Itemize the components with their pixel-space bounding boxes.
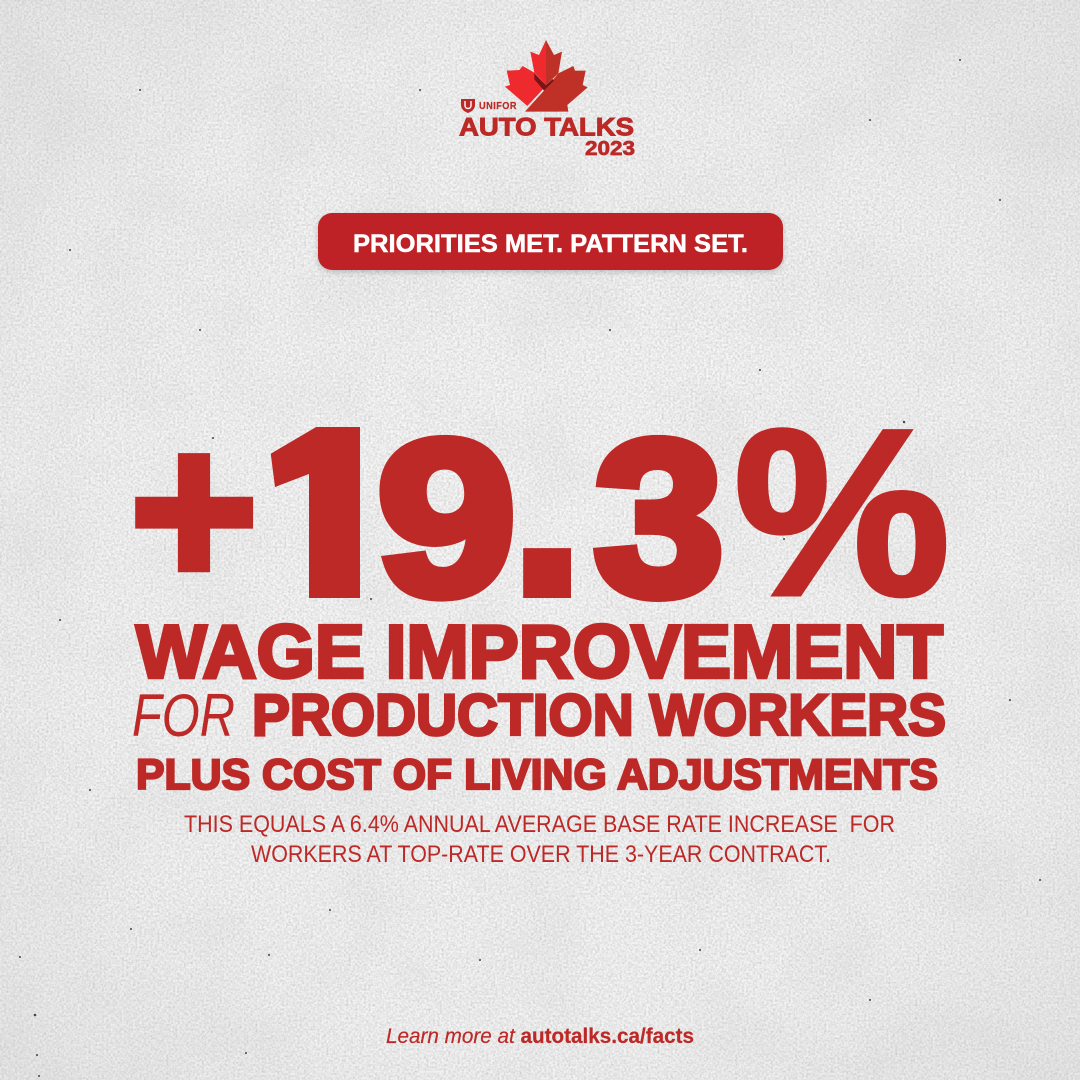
headline figure: +19.3%: 1 (257, 385, 402, 649)
heading: plus cost of living adjustments: PLUS COST OF LIVING ADJUSTMENTS (136, 751, 938, 799)
headline figure: +19.3% (135, 427, 946, 602)
heading: for production workers: FOR (132, 682, 235, 749)
heading: wage improvement: WAGE IMPROVEMENT (136, 610, 943, 694)
headline figure: +19.3%: % (734, 381, 950, 645)
text block: explanation (184, 811, 895, 868)
icon: maple leaf (505, 40, 588, 112)
heading: for production workers: PRODUCTION WORKERS (252, 683, 946, 748)
text block: explanation: THIS EQUALS A 6.4% ANNUAL AVERAGE BASE RATE INCREASE FOR (184, 811, 895, 838)
logo: Unifor Auto Talks 2023 (459, 40, 635, 160)
icon: Unifor shield (461, 99, 475, 113)
banner: priorities met: PRIORITIES MET. PATTERN SET. (353, 230, 748, 258)
Unifor wordmark: UNIFOR (479, 101, 517, 112)
headline figure: +19.3%: 9 (377, 395, 516, 641)
Auto Talks wordmark: AUTO TALKS (459, 114, 634, 142)
text block: explanation: WORKERS AT TOP-RATE OVER THE 3-YEAR CONTRACT. (251, 841, 831, 868)
banner: priorities met (318, 213, 783, 270)
footer: learn more link: Learn more at autotalks.ca/facts (386, 1025, 694, 1048)
headline figure: +19.3%: 3 (594, 395, 724, 641)
year 2023: 2023 (585, 137, 635, 160)
headline figure: +19.3%: + (130, 388, 258, 632)
headline figure: +19.3%: . (510, 350, 584, 650)
